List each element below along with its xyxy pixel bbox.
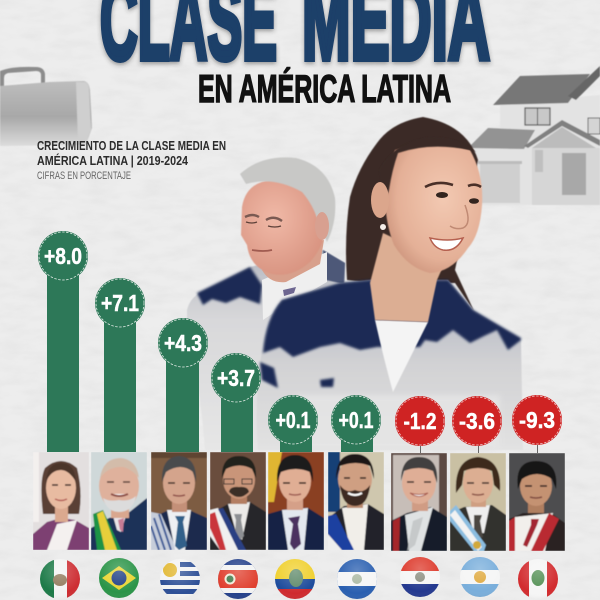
value badge: +0.1 El Salvador: +0.1 <box>338 407 374 433</box>
value badge: +0.1 El Salvador <box>331 395 381 445</box>
flag: Paraguay <box>400 557 440 598</box>
bar: Brazil <box>104 303 136 452</box>
chart heading: CIFRAS EN PORCENTAJE <box>37 170 131 182</box>
chart heading <box>37 139 226 182</box>
value badge: +8.0: +8.0 <box>44 243 82 269</box>
value badge: +7.1: +7.1 <box>101 290 139 316</box>
bar: Mexico <box>47 256 79 452</box>
chart heading: AMÉRICA LATINA | 2019-2024 <box>37 153 188 168</box>
icon: briefcase <box>0 67 92 146</box>
value badge: +3.7 <box>211 353 261 403</box>
flag: El Salvador <box>337 559 377 599</box>
bar chart: growth of middle class <box>47 256 538 453</box>
illustration: house <box>468 66 600 205</box>
value badge: -3.6 <box>452 396 502 446</box>
photo: Paraguay president <box>391 453 447 551</box>
portrait: woman smiling foreground <box>257 117 523 450</box>
photo: El Salvador president <box>328 452 384 550</box>
photo: Brazil president <box>91 452 147 550</box>
bar: Costa Rica <box>221 378 253 452</box>
value badge: +4.3: +4.3 <box>164 330 202 356</box>
photo: Ecuador president <box>268 452 324 550</box>
photo: Argentina president <box>450 453 506 551</box>
bar: Uruguay <box>166 344 199 452</box>
subtitle: EN AMÉRICA LATINA: EN AMÉRICA LATINA <box>198 67 451 111</box>
value badge: -3.6: -3.6 <box>459 408 495 434</box>
photo: Peru president <box>509 453 565 551</box>
stems: negative values <box>420 445 538 453</box>
value badge: -1.2 <box>395 396 445 446</box>
value badge: -1.2: -1.2 <box>404 408 436 434</box>
bar: El Salvador <box>341 420 373 452</box>
flag: Argentina <box>460 557 500 598</box>
value badge: +7.1 <box>95 278 145 328</box>
value badge: +8.0 <box>38 231 88 281</box>
flag: Peru <box>518 559 558 599</box>
photo: Costa Rica president <box>210 452 266 550</box>
flag: Costa Rica <box>218 559 258 599</box>
flag: Brazil <box>99 558 139 598</box>
chart heading: CRECIMIENTO DE LA CLASE MEDIA EN <box>37 139 226 153</box>
value badge: +4.3 <box>158 318 208 368</box>
value badge: -9.3 <box>512 395 562 445</box>
flag: Mexico <box>40 559 81 599</box>
photo: Uruguay president <box>151 452 207 550</box>
value badge: +3.7: +3.7 <box>217 365 255 391</box>
portrait: man in suit background <box>187 157 345 450</box>
bar: Ecuador <box>280 420 312 452</box>
value badge: -9.3: -9.3 <box>519 407 555 433</box>
value badge: +0.1 Ecuador <box>268 395 318 445</box>
flag: Ecuador <box>275 559 315 599</box>
flag: Uruguay <box>160 561 200 594</box>
photo: Mexico president <box>33 452 89 550</box>
value badge: +0.1 Ecuador: +0.1 <box>276 407 311 433</box>
